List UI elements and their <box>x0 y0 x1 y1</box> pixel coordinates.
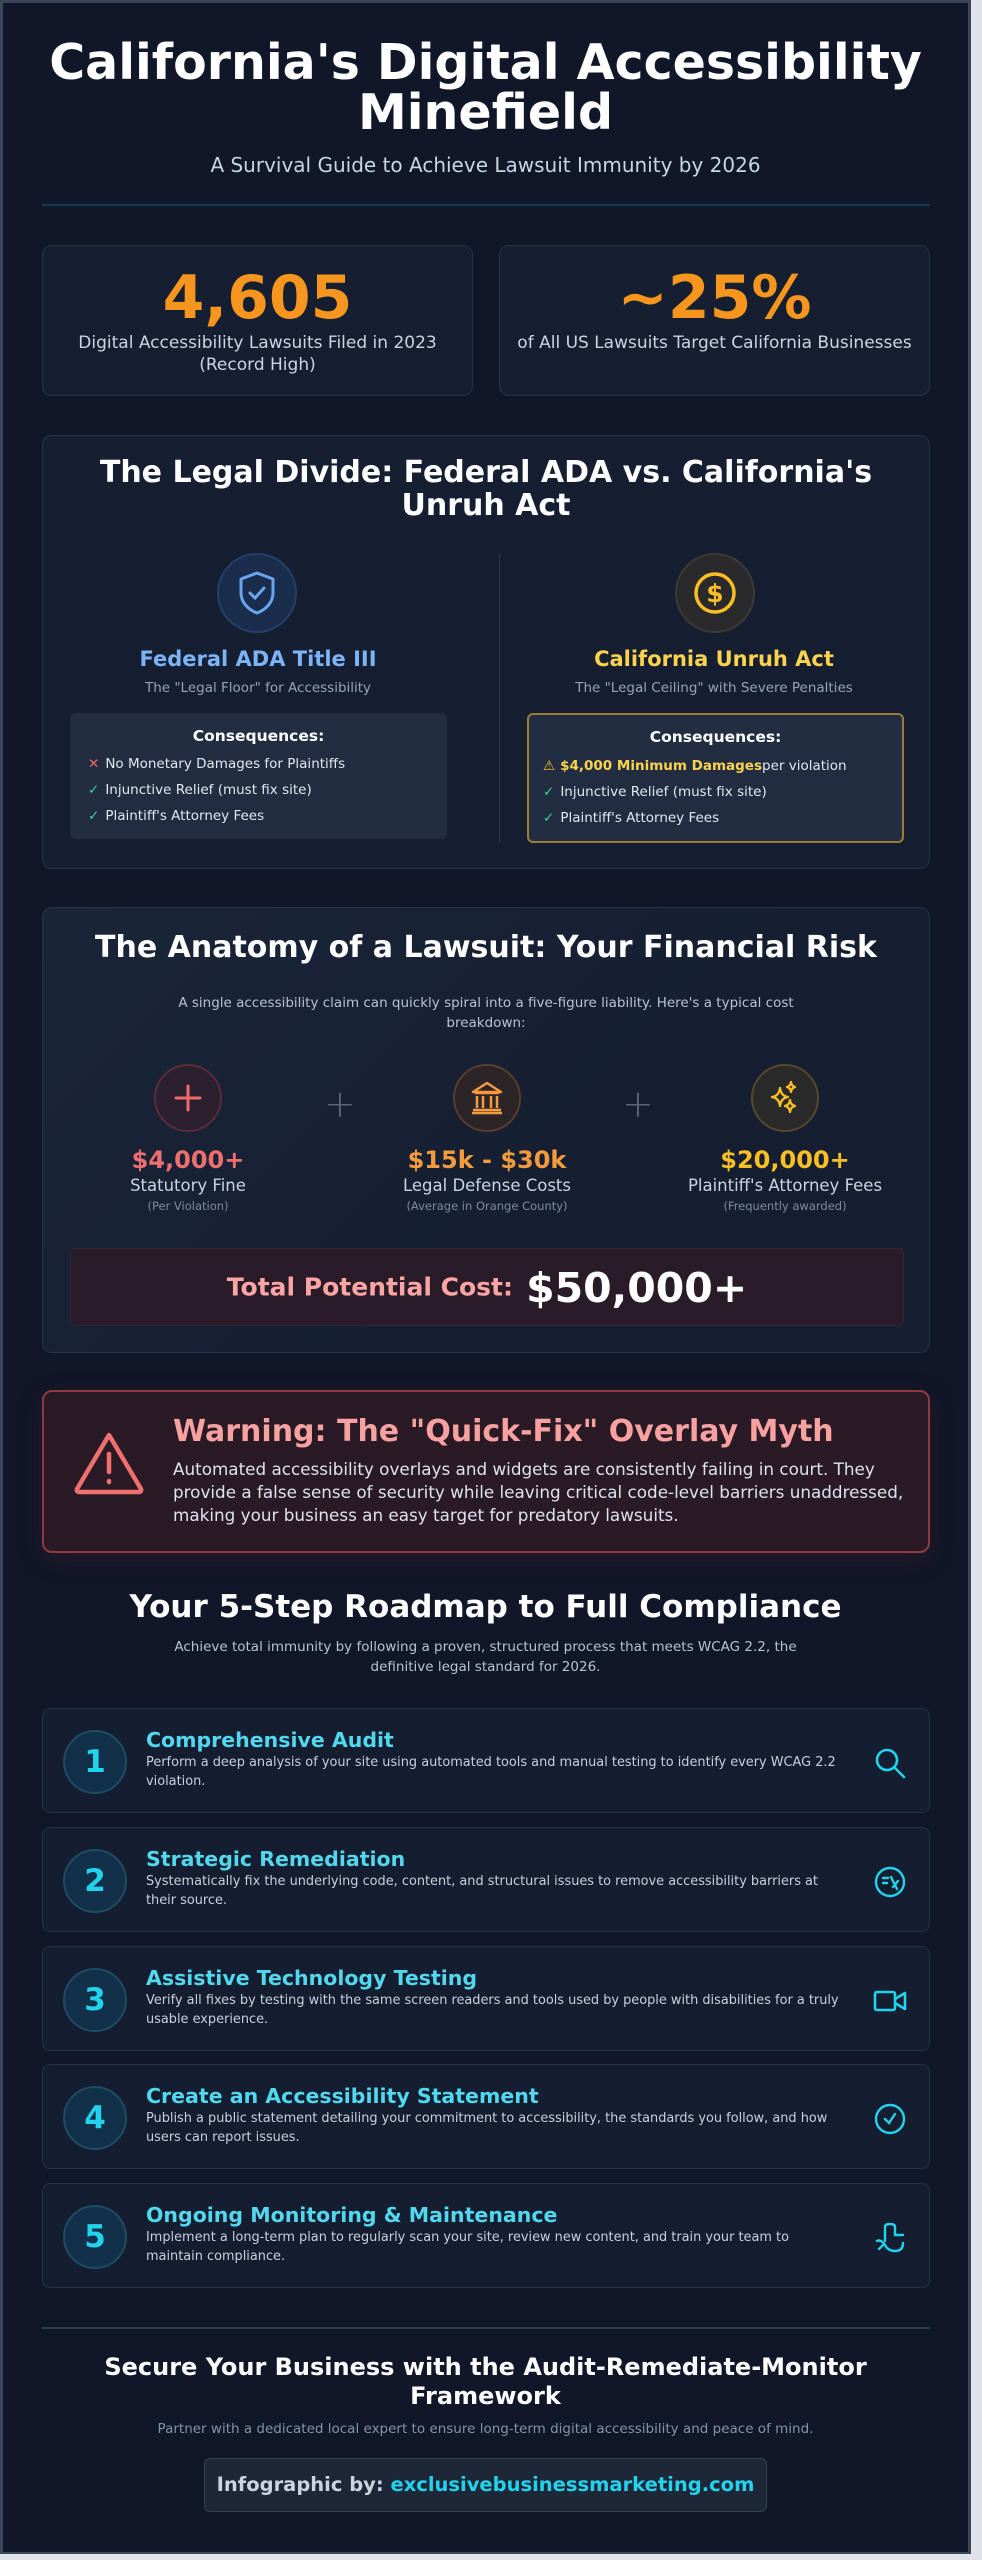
consequences: federal <box>70 713 447 839</box>
cost item: statutory fine <box>130 1064 246 1213</box>
step 5: Implement a long-term plan to regularly scan your site, review new content, and train your team to maintain compliance. <box>146 2230 789 2264</box>
panel: legal divide <box>42 435 930 869</box>
step 2: Systematically fix the underlying code, content, and structural issues to remove accessibility barriers at their source. <box>146 1874 818 1908</box>
footer subtitle: Partner with a dedicated local expert to ensure long-term digital accessibility and peace of mind. <box>158 2421 813 2437</box>
consequences: federal: ✓ Plaintiff's Attorney Fees <box>88 808 264 824</box>
roadmap subtitle: Achieve total immunity by following a proven, structured process that meets WCAG 2.2, the <box>174 1639 797 1655</box>
roadmap subtitle: definitive legal standard for 2026. <box>371 1659 600 1675</box>
consequences: california: Consequences: <box>650 728 781 746</box>
step 3: Verify all fixes by testing with the same screen readers and tools used by people with disabilities for a truly usable experience. <box>146 1993 839 2027</box>
cost item: attorney fees: Plaintiff's Attorney Fees <box>688 1176 882 1195</box>
icon: video <box>874 1990 906 2012</box>
step 2: Strategic Remediation <box>146 1847 405 1871</box>
cost item: legal defense: Legal Defense Costs <box>403 1176 571 1195</box>
plus sign: + <box>324 1082 356 1126</box>
total cost bar: Total Potential Cost: $50,000+ <box>227 1264 747 1312</box>
panel heading: Unruh Act <box>401 488 570 523</box>
intro text <box>178 995 794 1031</box>
consequences: california: ✓ Plaintiff's Attorney Fees <box>543 810 719 826</box>
icon: remediation <box>874 1866 906 1898</box>
icon: check circle <box>874 2104 906 2134</box>
panel heading <box>100 455 872 523</box>
footer heading <box>104 2353 867 2410</box>
consequences: federal: Consequences: <box>193 727 324 745</box>
heading: The Anatomy of a Lawsuit: Your Financial Risk <box>95 930 877 965</box>
step 2 <box>42 1827 930 1932</box>
subtitle: A Survival Guide to Achieve Lawsuit Immunity by 2026 <box>210 153 761 177</box>
step 4: Publish a public statement detailing your commitment to accessibility, the standards you follow, and how users can report issues. <box>146 2111 827 2145</box>
consequences: california: ✓ Injunctive Relief (must fix site) <box>543 784 767 800</box>
step 5 <box>42 2183 930 2288</box>
step 1: Perform a deep analysis of your site using automated tools and manual testing to identify every WCAG 2.2 violation. <box>146 1755 836 1789</box>
step 1: 1 <box>84 1744 106 1780</box>
footer heading: Framework <box>410 2382 561 2410</box>
step 4 <box>42 2064 930 2169</box>
step 3 <box>42 1946 930 2051</box>
federal subtitle: The "Legal Floor" for Accessibility <box>145 680 371 696</box>
step 5: Ongoing Monitoring & Maintenance <box>146 2203 557 2227</box>
cost item: attorney fees <box>688 1064 882 1213</box>
cost item: statutory fine: Statutory Fine <box>130 1176 246 1195</box>
total cost bar <box>70 1248 904 1326</box>
stat card: 25% <box>499 245 930 396</box>
cost item: statutory fine: (Per Violation) <box>147 1199 229 1213</box>
cost item: statutory fine: $4,000+ <box>132 1146 244 1174</box>
stat label: Digital Accessibility Lawsuits Filed in 2023 <box>78 333 437 353</box>
warning text: Automated accessibility overlays and widgets are consistently failing in court. They provide a false sense of security while leaving critical code-level barriers unaddressed, making your business an easy target for predatory lawsuits. <box>173 1459 903 1525</box>
federal heading: Federal ADA Title III <box>139 647 377 671</box>
title <box>49 34 922 141</box>
cost item: legal defense: $15k - $30k <box>408 1146 566 1174</box>
stat number 4,605: 4,605 <box>163 263 352 333</box>
stat label <box>78 333 437 375</box>
title: California's Digital Accessibility <box>49 34 922 91</box>
intro text: A single accessibility claim can quickly spiral into a five-figure liability. Here's a typical cost <box>178 995 794 1011</box>
panel: anatomy of a lawsuit <box>42 907 930 1353</box>
stat label: of All US Lawsuits Target California Businesses <box>517 333 912 353</box>
stat label: (Record High) <box>199 355 316 375</box>
stat card: lawsuits <box>42 245 473 396</box>
icon: search <box>876 1748 906 1778</box>
step 5: 5 <box>84 2219 106 2255</box>
credit badge: Infographic by: exclusivebusinessmarketing.com <box>217 2473 754 2496</box>
icon: shield <box>217 553 297 633</box>
panel heading: The Legal Divide: Federal ADA vs. California's <box>100 455 872 490</box>
cost item: legal defense <box>403 1064 571 1213</box>
step 1 <box>42 1708 930 1813</box>
plus sign: + <box>622 1082 654 1126</box>
step 4: 4 <box>84 2100 106 2136</box>
icon: monitoring <box>876 2222 904 2252</box>
consequences: california <box>527 713 904 843</box>
california subtitle: The "Legal Ceiling" with Severe Penalties <box>575 680 853 696</box>
title: Minefield <box>358 84 613 141</box>
consequences: california: ⚠ $4,000 Minimum Damagesper violation <box>543 758 847 774</box>
california heading: California Unruh Act <box>594 647 834 671</box>
cost item: attorney fees: $20,000+ <box>720 1146 850 1174</box>
step 3: 3 <box>84 1982 106 2018</box>
step 3: Assistive Technology Testing <box>146 1966 477 1990</box>
warning heading: Warning: The "Quick-Fix" Overlay Myth <box>173 1414 834 1449</box>
roadmap heading: Your 5-Step Roadmap to Full Compliance <box>130 1589 841 1625</box>
icon: dollar: $ <box>706 579 724 608</box>
intro text: breakdown: <box>446 1015 526 1031</box>
step 4: Create an Accessibility Statement <box>146 2084 539 2108</box>
stat number 25%: ~25% <box>618 263 811 333</box>
roadmap subtitle <box>174 1639 797 1675</box>
credit badge <box>204 2458 767 2512</box>
consequences: federal: ✓ Injunctive Relief (must fix site) <box>88 782 312 798</box>
consequences: federal: ✕ No Monetary Damages for Plaintiffs <box>88 756 345 772</box>
callout: overlay warning <box>42 1390 930 1553</box>
step 2: 2 <box>84 1863 106 1899</box>
cost item: attorney fees: (Frequently awarded) <box>723 1199 847 1213</box>
icon: dollar <box>675 553 755 633</box>
cost item: legal defense: (Average in Orange County) <box>406 1199 568 1213</box>
icon: warning triangle <box>74 1432 144 1494</box>
step 1: Comprehensive Audit <box>146 1728 394 1752</box>
footer heading: Secure Your Business with the Audit-Remediate-Monitor <box>104 2353 867 2381</box>
